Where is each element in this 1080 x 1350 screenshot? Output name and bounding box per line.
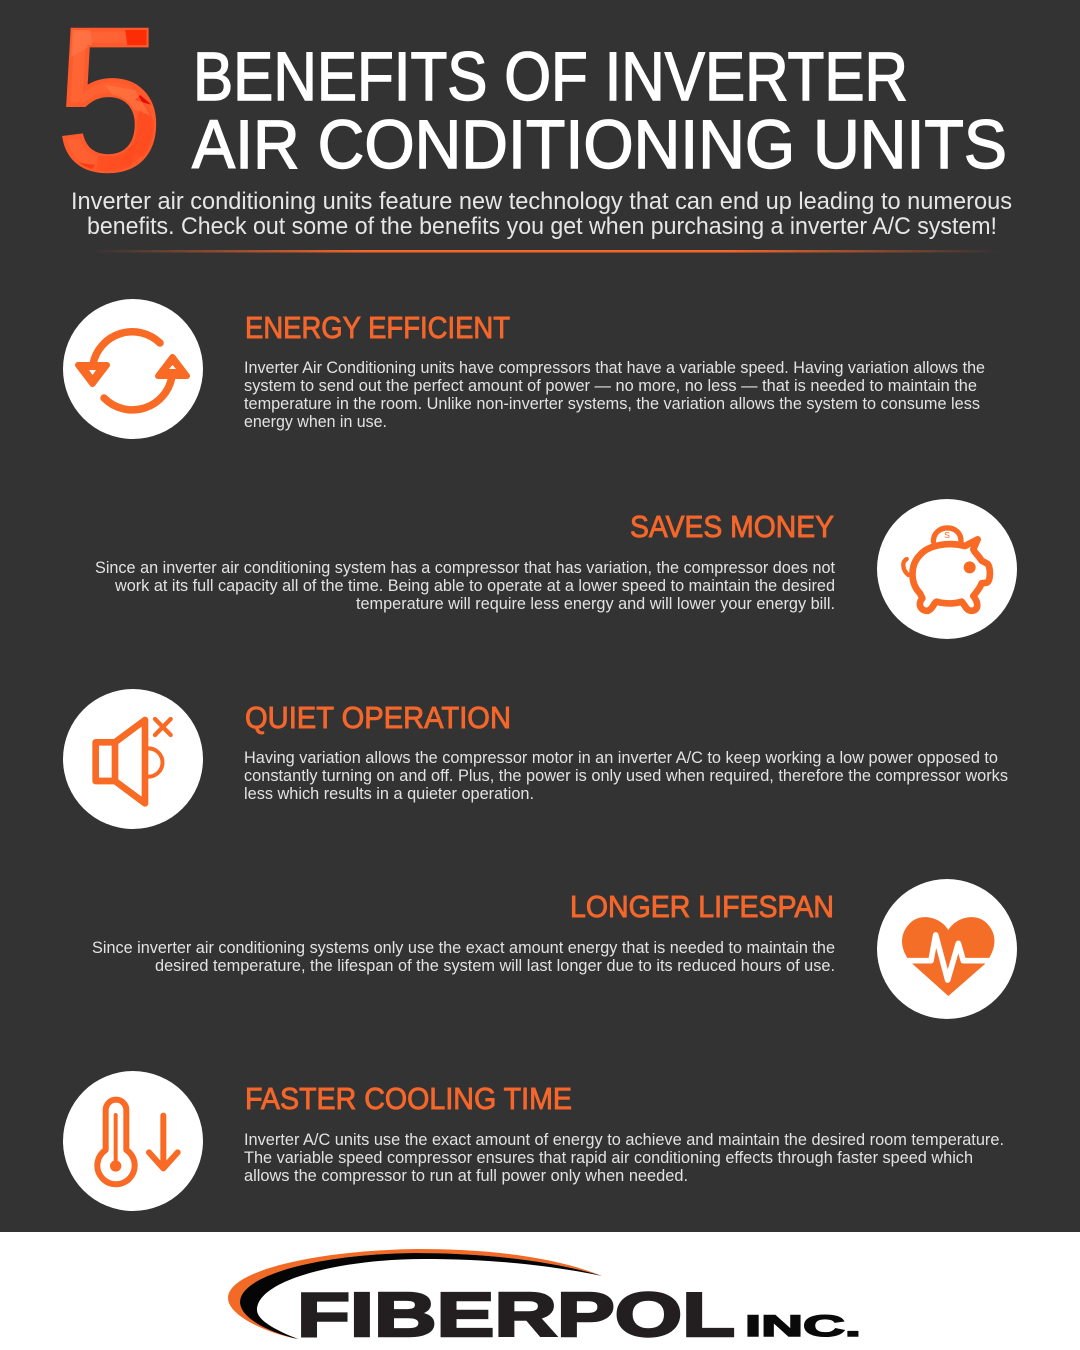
body text: system to send out the perfect amount of power — no more, no less — that is needed to maintain the xyxy=(244,376,977,395)
body text: Having variation allows the compressor motor in an inverter A/C to keep working a low power opposed to xyxy=(244,748,998,767)
icon: piggy bank xyxy=(877,499,1017,639)
body text: Since an inverter air conditioning system has a compressor that has variation, the compressor does not xyxy=(95,558,835,577)
footer: company logo xyxy=(0,1232,1080,1350)
icon: piggy bank: S xyxy=(944,530,950,540)
logo wordmark: FIBERPOL xyxy=(297,1281,735,1350)
heading: FASTER COOLING TIME xyxy=(245,1081,572,1116)
body text: Since inverter air conditioning systems only use the exact amount energy that is needed to maintain the xyxy=(92,938,835,957)
panel: quiet operation xyxy=(63,689,1008,829)
title: AIR CONDITIONING UNITS xyxy=(192,106,1007,183)
heading: LONGER LIFESPAN xyxy=(570,889,834,924)
intro text: benefits. Check out some of the benefits you get when purchasing a inverter A/C system! xyxy=(87,213,997,240)
body text: Inverter Air Conditioning units have compressors that have a variable speed. Having variation allows the xyxy=(244,358,985,377)
body text: constantly turning on and off. Plus, the power is only used when required, therefore the compressor works xyxy=(244,766,1008,785)
body text: allows the compressor to run at full power only when needed. xyxy=(244,1166,688,1185)
body text xyxy=(92,938,835,975)
panel: faster cooling time xyxy=(63,1071,1004,1211)
body text: temperature in the room. Unlike non-inverter systems, the variation allows the system to consume less xyxy=(244,394,980,413)
title: BENEFITS OF INVERTER xyxy=(193,38,908,115)
icon: heart with pulse xyxy=(877,879,1017,1019)
body text xyxy=(95,558,835,613)
body text: temperature will require less energy and will lower your energy bill. xyxy=(356,594,835,613)
icon: muted speaker xyxy=(63,689,203,829)
body text xyxy=(244,358,985,431)
body text: The variable speed compressor ensures that rapid air conditioning effects through faster speed which xyxy=(244,1148,973,1167)
icon: thermometer and down arrow xyxy=(63,1071,203,1211)
logo suffix: INC. xyxy=(745,1310,861,1343)
intro text: Inverter air conditioning units feature new technology that can end up leading to numerous xyxy=(71,188,1012,215)
body text: less which results in a quieter operation. xyxy=(244,784,534,803)
icon: recycle arrows xyxy=(63,299,203,439)
heading: ENERGY EFFICIENT xyxy=(245,310,510,345)
body text: desired temperature, the lifespan of the system will last longer due to its reduced hours of use. xyxy=(155,956,835,975)
heading: SAVES MONEY xyxy=(630,509,834,544)
body text xyxy=(244,748,1008,803)
logo swoosh xyxy=(228,1249,602,1339)
panel: energy efficient xyxy=(63,299,985,439)
panel: longer lifespan xyxy=(92,879,1017,1019)
body text: energy when in use. xyxy=(244,412,387,431)
body text xyxy=(244,1130,1004,1185)
panel: saves money xyxy=(95,499,1017,639)
intro text xyxy=(71,188,1012,240)
heading: QUIET OPERATION xyxy=(245,700,511,735)
body text: work at its full capacity all of the time. Being able to operate at a lower speed to maintain the desired xyxy=(114,576,835,595)
big number 5 xyxy=(62,28,156,174)
body text: Inverter A/C units use the exact amount of energy to achieve and maintain the desired room temperature. xyxy=(244,1130,1004,1149)
title xyxy=(192,38,1007,183)
